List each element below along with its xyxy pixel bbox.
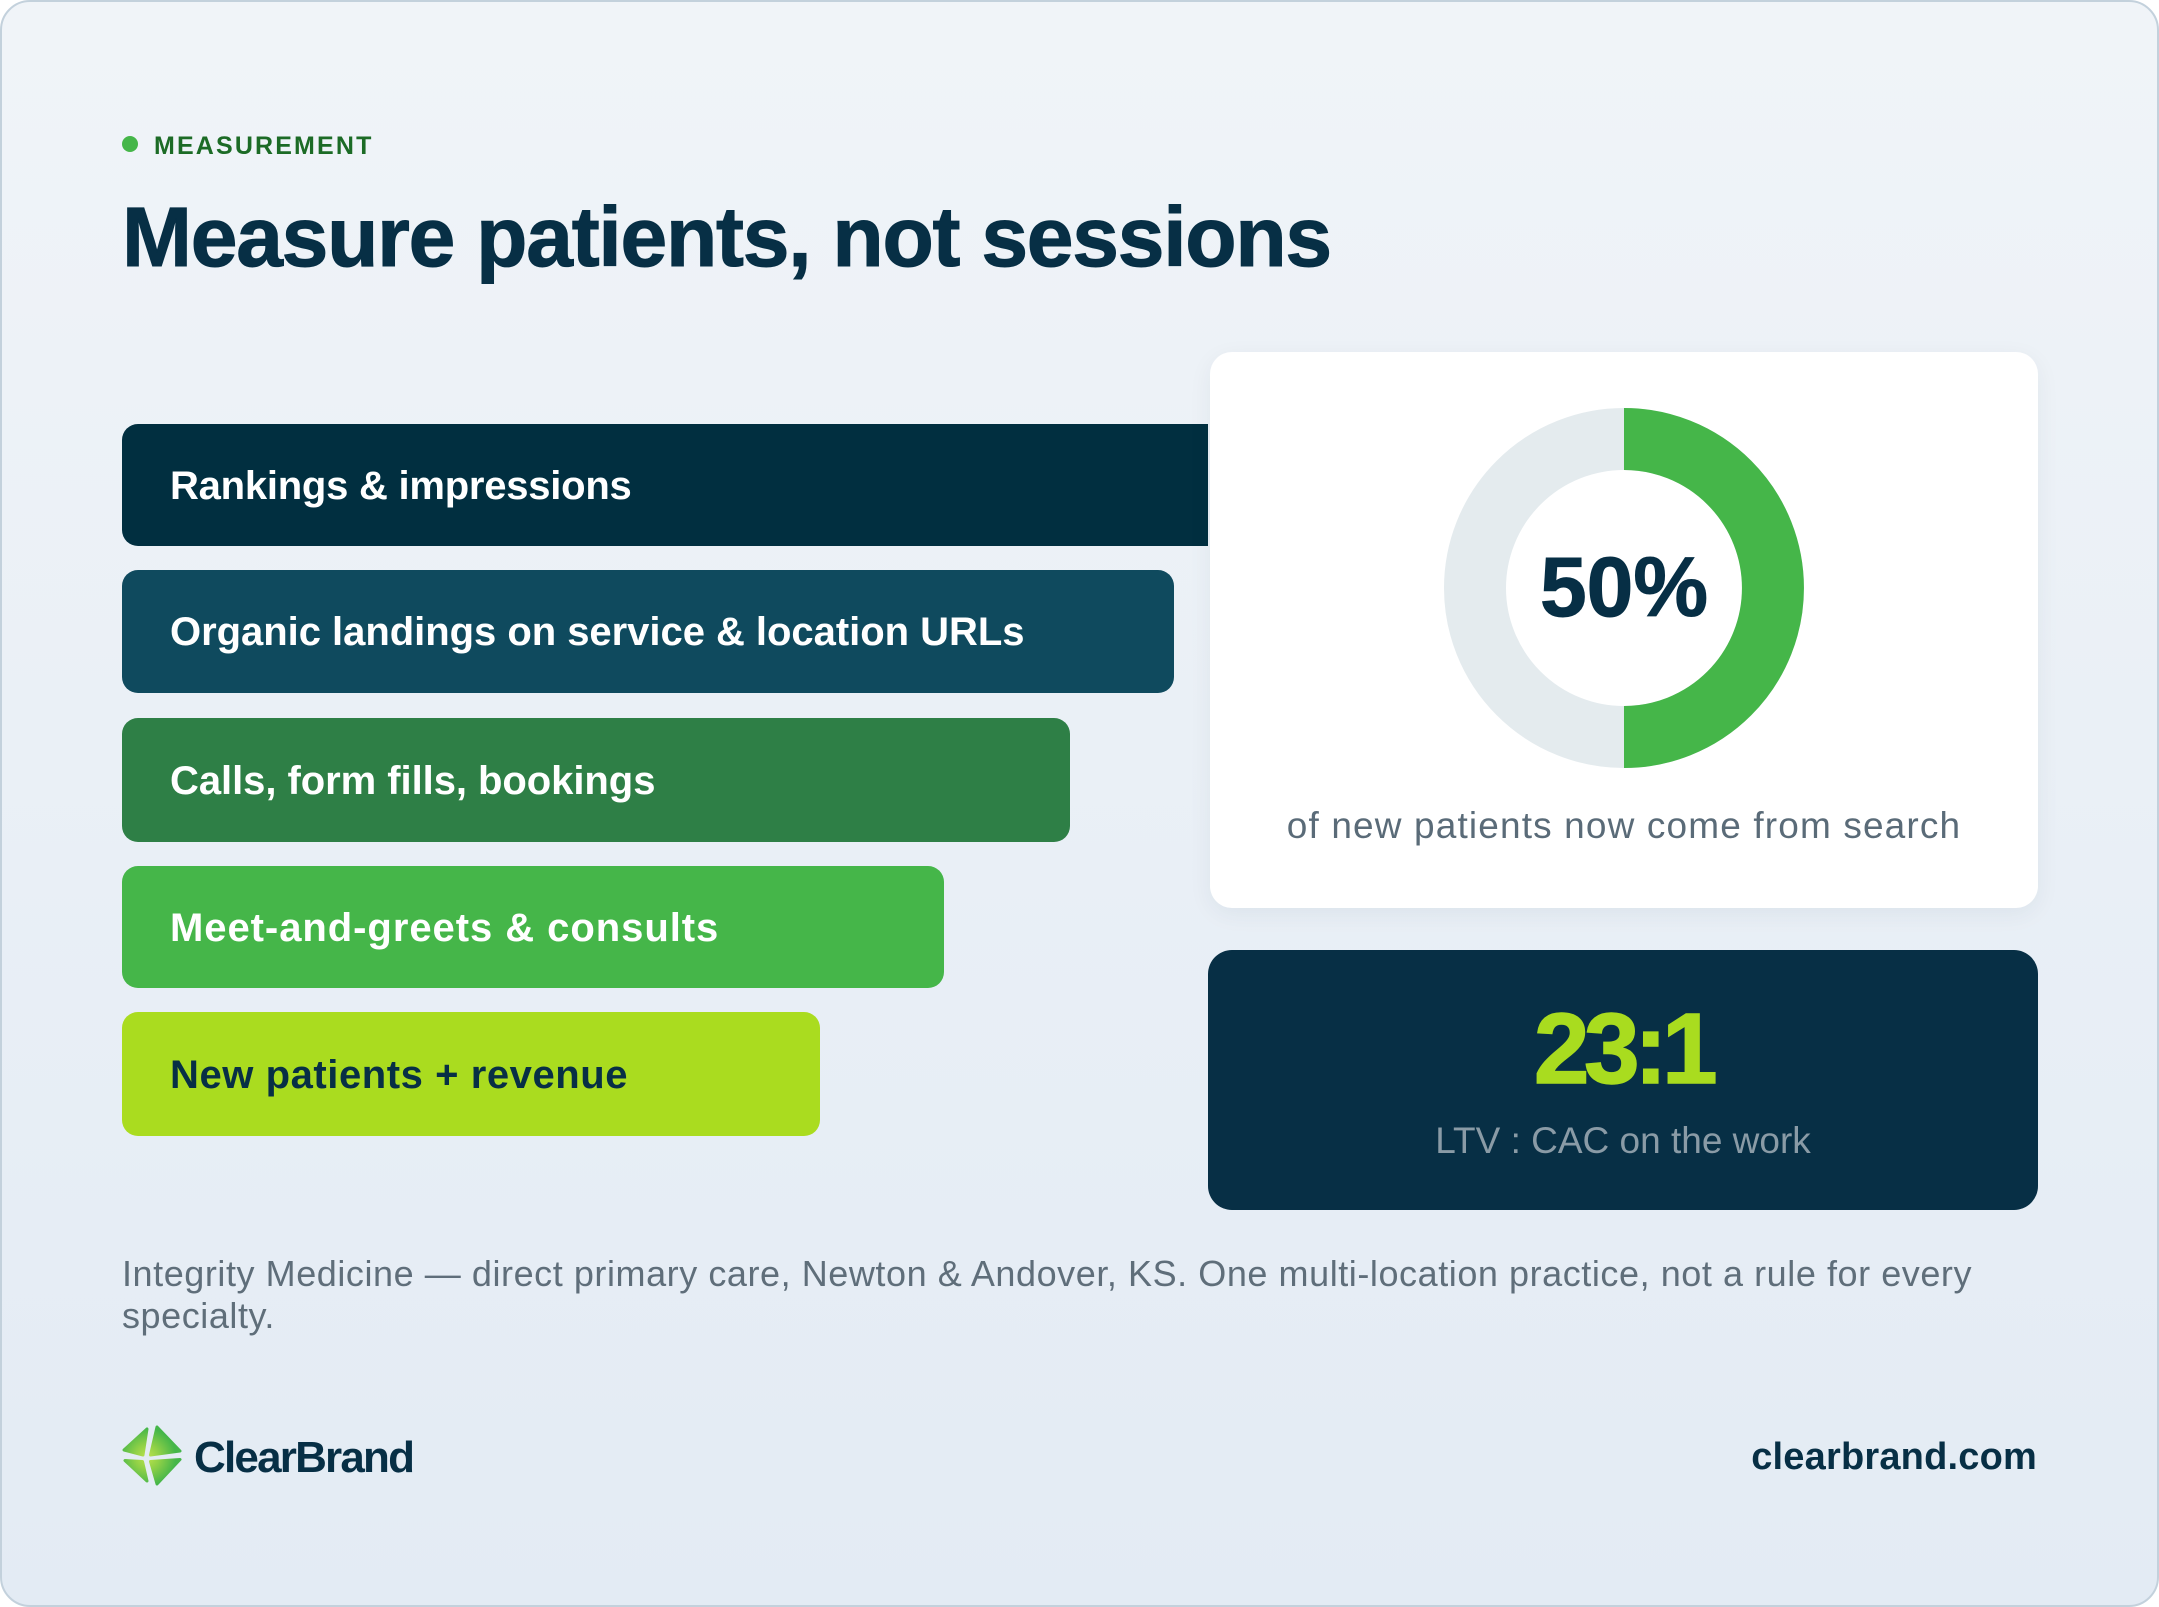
donut value: 50% [1540,540,1708,634]
website url: clearbrand.com [1751,1436,2037,1478]
footnote: Integrity Medicine — direct primary care, Newton & Andover, KS. One multi-location practice, not a rule for every specialty. [122,1253,1972,1336]
donut chart [1444,408,1804,768]
bar: organic landings [122,570,1174,693]
donut caption: of new patients now come from search [1287,805,1961,846]
ratio value: 23:1 [1534,993,1712,1105]
bar: meet and greets [122,866,944,988]
panel: donut stat [1210,352,2038,908]
bar: new patients [122,1012,820,1136]
bar: rankings [122,424,1208,546]
eyebrow label: MEASUREMENT [154,132,374,160]
wordmark: ClearBrand [194,1433,413,1482]
bar: meet and greets: Meet-and-greets & consults [170,906,719,950]
ratio caption: LTV : CAC on the work [1435,1120,1811,1161]
brand logo [122,1426,413,1486]
bar: calls [122,718,1070,842]
title: Measure patients, not sessions [122,190,1331,284]
bar: new patients: New patients + revenue [170,1052,628,1096]
icon: ClearBrand diamond mark [122,1426,182,1486]
bar: rankings: Rankings & impressions [170,464,632,508]
eyebrow dot [122,136,138,152]
bar: organic landings: Organic landings on service & location URLs [170,610,1024,654]
panel: LTV CAC ratio [1208,950,2038,1210]
bar: calls: Calls, form fills, bookings [170,758,655,802]
